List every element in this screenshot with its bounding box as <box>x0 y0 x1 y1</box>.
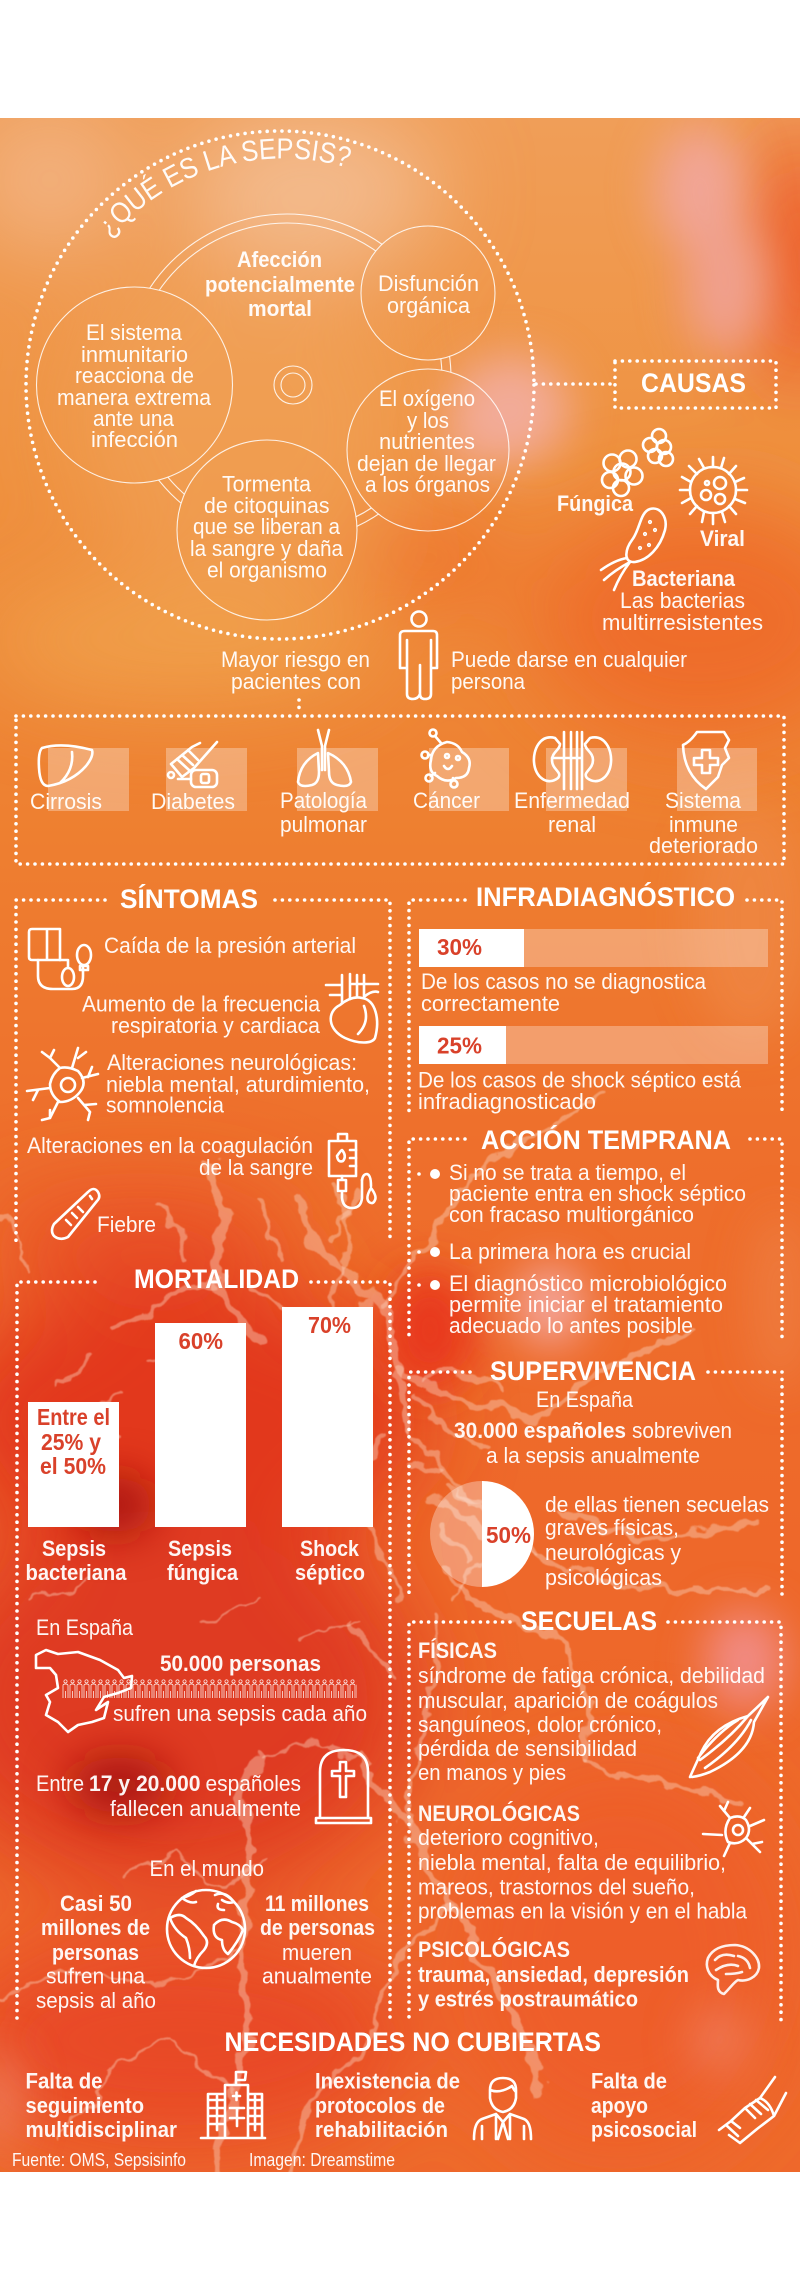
text: cualquier persona <box>451 647 687 694</box>
text: secuelas graves: de ellas tienen secuelas <box>545 1492 769 1517</box>
bar chart <box>26 1307 373 1585</box>
text: 11 millones: de personas <box>260 1915 375 1940</box>
text: sufren una sepsis: sufren una sepsis cada año <box>113 1701 367 1726</box>
text: fallecen: Entre <box>36 1771 84 1796</box>
text: enfermedad renal: renal <box>548 812 596 837</box>
text: 30.000 españoles <box>454 1418 732 1468</box>
text: neurológicas: deterioro cognitivo, <box>418 1825 599 1850</box>
icon: thermometer <box>52 1189 99 1239</box>
text: bacteriana: Bacteriana <box>632 566 736 591</box>
icon: map of Spain <box>36 1650 132 1732</box>
text: fallecen <box>36 1771 301 1821</box>
heading: supervivencia: SUPERVIVENCIA <box>490 1356 696 1386</box>
text: 30% caption: correctamente <box>421 991 560 1016</box>
icon: hospital <box>201 2072 265 2138</box>
text: neurológicas: problemas en la visión y en el habla <box>418 1898 748 1924</box>
bubble: sistema inmunitario: infección <box>91 427 178 452</box>
bar chart: séptico <box>295 1560 365 1585</box>
bubble: tormenta de citoquinas: el organismo <box>207 558 327 582</box>
text: sistema inmune deteriorado <box>649 788 758 858</box>
heading: infradiagnóstico: INFRADIAGNÓSTICO <box>476 881 735 912</box>
text: 11 millones <box>260 1891 375 1988</box>
pie chart: 50%: 50% <box>486 1522 531 1548</box>
text: falta de apoyo: apoyo <box>591 2093 648 2118</box>
bar chart: el 50% <box>40 1453 106 1479</box>
text: secuelas graves: psicológicas <box>545 1565 662 1590</box>
text: aumento frecuencia <box>82 992 321 1038</box>
panel: necesidades no cubiertas <box>26 2027 786 2143</box>
text: coagulación: Alteraciones en la coagulación <box>27 1133 313 1158</box>
bullet: si no se trata: con fracaso multiorgánico <box>449 1202 694 1227</box>
text: psicológicas <box>418 1937 689 2012</box>
text: patología pulmonar <box>280 788 368 837</box>
bar chart: 25% y <box>41 1429 101 1455</box>
bar chart: 70% <box>308 1312 351 1338</box>
text: enfermedad renal: Enfermedad <box>514 788 630 813</box>
bullet: diagnóstico microbiológico: permite iniciar el tratamiento <box>449 1292 723 1317</box>
heading: acción temprana: ACCIÓN TEMPRANA <box>481 1124 731 1155</box>
text: 11 millones: anualmente <box>262 1964 372 1988</box>
label: cáncer: Cáncer <box>413 788 480 813</box>
bubble: tormenta de citoquinas: que se liberan a <box>193 514 341 539</box>
text: bacteriana: Las bacterias <box>620 588 745 613</box>
pale squares <box>48 748 757 811</box>
text: en España: En España <box>36 1615 134 1640</box>
bar chart: fúngica <box>167 1560 239 1585</box>
text: en el mundo: En el mundo <box>150 1856 264 1881</box>
text: caída de la presión: Caída de la presión arterial <box>104 933 356 958</box>
text: falta de seguimiento <box>26 2068 177 2142</box>
icon: helping hands <box>719 2077 786 2143</box>
pie chart: 50% <box>430 1481 534 1587</box>
text: 30% caption: De los casos no se diagnostica <box>421 969 707 994</box>
bullet: si no se trata <box>419 1160 746 1227</box>
text: fallecen: fallecen anualmente <box>110 1796 301 1821</box>
bar chart: Sepsis <box>168 1536 232 1561</box>
connecting ring <box>149 214 452 527</box>
text: aumento frecuencia: respiratoria y cardiaca <box>111 1013 321 1038</box>
text: afección potencialmente mortal: mortal <box>248 296 312 321</box>
bullet: si no se trata: paciente entra en shock séptico <box>449 1181 746 1206</box>
icon: cancer cell <box>422 730 470 788</box>
icon: brain <box>707 1945 759 1994</box>
text: fallecen: 17 y 20.000 <box>89 1771 200 1796</box>
text: enfermedad renal <box>514 788 630 837</box>
text: falta de seguimiento: Falta de <box>26 2068 102 2094</box>
text: falta de apoyo <box>591 2068 697 2142</box>
icon: row of people <box>62 1679 357 1698</box>
text: coagulación: de la sangre <box>199 1155 313 1180</box>
bubble: sistema inmunitario: inmunitario <box>81 342 188 367</box>
icon: shield <box>683 732 729 789</box>
panel: secuelas <box>409 1606 781 2022</box>
text: inexistencia de protocolos: Inexistencia de <box>315 2068 460 2094</box>
text: físicas: muscular, aparición de coágulos <box>418 1688 718 1713</box>
text: casi 50 millones: Casi 50 <box>60 1891 132 1916</box>
label: viral: Viral <box>700 526 745 551</box>
bar chart: Sepsis <box>42 1536 106 1561</box>
text: neurológicas <box>418 1801 748 1924</box>
icon: virus <box>680 457 747 524</box>
text: afección potencialmente mortal: Afección <box>237 247 322 272</box>
text: afección potencialmente mortal <box>205 247 355 321</box>
bubble: disfunción orgánica <box>361 226 495 360</box>
text: neurológicas: niebla mental, falta de equilibrio, <box>418 1850 726 1875</box>
bar chart: bacteriana <box>26 1560 127 1585</box>
text: 25% caption <box>418 1068 742 1114</box>
text: 30% caption <box>421 969 707 1016</box>
text: físicas: síndrome de fatiga crónica, debilidad <box>418 1663 765 1688</box>
text: físicas: FÍSICAS <box>418 1638 497 1663</box>
text: fiebre: Fiebre <box>97 1212 156 1237</box>
bubble: tormenta de citoquinas: la sangre y daña <box>190 536 344 561</box>
bar chart: 60% <box>178 1328 223 1354</box>
text: 30.000 españoles: 30.000 españoles <box>454 1418 626 1443</box>
icon: muscle <box>690 1697 768 1777</box>
text: inexistencia de protocolos: rehabilitación <box>315 2117 448 2142</box>
title: curved heading: ¿QUÉ ES LA SEPSIS? <box>103 138 351 238</box>
text: bacteriana <box>602 566 763 635</box>
text: psicológicas: trauma, ansiedad, depresión <box>418 1962 689 1987</box>
text: sistema inmune deteriorado: deteriorado <box>649 833 758 858</box>
bubble: tormenta de citoquinas <box>177 440 357 620</box>
source credit: Imagen: Dreamstime <box>249 2150 395 2170</box>
text: falta de apoyo: psicosocial <box>591 2117 697 2142</box>
icon: blood pressure cuff <box>29 929 91 989</box>
bubble: oxígeno y nutrientes <box>347 369 509 531</box>
heading: secuelas: SECUELAS <box>521 1606 657 1636</box>
text: patología pulmonar: Patología <box>280 788 368 813</box>
panel: infradiagnóstico <box>409 881 782 1116</box>
text: fallecen: españoles <box>206 1771 301 1796</box>
bullet: primera hora: La primera hora es crucial <box>449 1239 691 1264</box>
icon: lungs <box>298 730 351 786</box>
text: 50.000 personas: 50.000 personas <box>160 1651 321 1676</box>
bubble: oxígeno y nutrientes: a los órganos <box>365 472 490 497</box>
bubble: oxígeno y nutrientes: dejan de llegar <box>357 451 496 476</box>
text: casi 50 millones: sepsis al año <box>36 1988 156 2013</box>
text: 11 millones: 11 millones <box>265 1891 369 1916</box>
text: alteraciones neurológicas: Alteraciones neurológicas: <box>107 1050 357 1075</box>
heading: mortalidad: MORTALIDAD <box>134 1264 299 1294</box>
text: alteraciones neurológicas: niebla mental, aturdimiento, <box>106 1072 370 1097</box>
bar: 30%: 30% <box>437 934 482 960</box>
text: 30.000 españoles: a la sepsis anualmente <box>486 1443 700 1468</box>
text: alteraciones neurológicas: somnolencia <box>106 1092 225 1118</box>
bubble: oxígeno y nutrientes: nutrientes <box>379 429 475 454</box>
text: inexistencia de protocolos <box>315 2068 460 2142</box>
icon: person <box>400 612 437 699</box>
text: cualquier persona: Puede darse en cualquier <box>451 647 687 672</box>
icon: heart <box>326 974 378 1042</box>
icon: bacteria <box>601 509 666 590</box>
icon: neuron small <box>703 1802 764 1856</box>
text: mayor riesgo <box>221 647 370 694</box>
text: neurológicas: mareos, trastornos del sueño, <box>418 1874 695 1900</box>
bubble: disfunción orgánica: orgánica <box>387 293 471 318</box>
text: 11 millones: mueren <box>282 1940 352 1965</box>
bubble: sistema inmunitario: ante una <box>93 406 175 431</box>
bubble: tormenta de citoquinas: Tormenta <box>222 472 312 496</box>
bubble: oxígeno y nutrientes: El oxígeno <box>379 386 475 411</box>
heading: causas: CAUSAS <box>641 368 746 398</box>
text: coagulación <box>27 1133 313 1180</box>
text: mayor riesgo: pacientes con <box>231 669 361 694</box>
icon: kidneys <box>534 732 611 789</box>
panel: síntomas <box>16 883 390 1242</box>
source credit <box>12 2150 395 2170</box>
text: físicas: en manos y pies <box>418 1760 566 1785</box>
text: cualquier persona: persona <box>451 669 526 694</box>
text: aumento frecuencia: Aumento de la frecuencia <box>82 992 321 1016</box>
text: casi 50 millones: millones de <box>41 1915 150 1940</box>
text: afección potencialmente mortal: potencialmente <box>205 272 355 297</box>
bullet: diagnóstico microbiológico <box>419 1271 727 1338</box>
icon: globe <box>167 1890 245 1968</box>
label: fúngica: Fúngica <box>557 491 634 516</box>
text: secuelas graves <box>545 1492 769 1590</box>
text: casi 50 millones: sufren una <box>46 1964 146 1988</box>
text: falta de seguimiento: multidisciplinar <box>26 2117 177 2142</box>
panel: causas <box>536 361 776 635</box>
bar chart: Entre el <box>37 1404 110 1430</box>
text: patología pulmonar: pulmonar <box>280 812 367 837</box>
heading: necesidades: NECESIDADES NO CUBIERTAS <box>224 2027 601 2057</box>
bubble: sistema inmunitario: El sistema <box>86 320 183 345</box>
text: 25% caption: infradiagnosticado <box>418 1089 596 1114</box>
panel: acción temprana <box>409 1124 782 1342</box>
text: neurológicas: NEUROLÓGICAS <box>418 1801 580 1826</box>
text: falta de apoyo: Falta de <box>591 2068 667 2094</box>
text: bacteriana: multirresistentes <box>602 610 763 635</box>
icon: doctor <box>474 2078 531 2139</box>
text: casi 50 millones <box>36 1891 156 2013</box>
text: físicas: sanguíneos, dolor crónico, <box>418 1712 662 1737</box>
bubble: disfunción orgánica: Disfunción <box>378 271 479 296</box>
bar: 30% <box>419 929 768 967</box>
bubble: sistema inmunitario: reacciona de <box>75 363 194 388</box>
icon: neuron <box>27 1048 98 1120</box>
panel: patologías de riesgo <box>16 716 784 864</box>
text: falta de seguimiento: seguimiento <box>26 2093 144 2118</box>
bullet: diagnóstico microbiológico: adecuado lo antes posible <box>449 1313 693 1338</box>
text: secuelas graves: graves físicas, <box>545 1515 679 1540</box>
text: alteraciones neurológicas <box>106 1050 370 1118</box>
text: sistema inmune deteriorado: inmune <box>669 812 738 837</box>
icon: tombstone <box>316 1750 371 1823</box>
text: en España: En España <box>536 1387 634 1412</box>
text: psicológicas: PSICOLÓGICAS <box>418 1937 570 1962</box>
bubble: sistema inmunitario: manera extrema <box>57 385 212 410</box>
bubble: sistema inmunitario <box>36 287 232 483</box>
bubble: tormenta de citoquinas: de citoquinas <box>204 493 330 518</box>
icon: IV drip <box>329 1134 376 1208</box>
text: psicológicas: y estrés postraumático <box>418 1986 638 2012</box>
heading: síntomas: SÍNTOMAS <box>120 883 258 914</box>
center ring icon <box>274 366 312 404</box>
text: físicas: pérdida de sensibilidad <box>418 1736 637 1761</box>
label: diabetes: Diabetes <box>151 789 235 814</box>
panel: mortalidad <box>17 1264 390 2024</box>
label: cirrosis: Cirrosis <box>30 789 102 814</box>
icon: fungi <box>602 429 673 496</box>
icon: liver <box>39 745 92 786</box>
bar: 25%: 25% <box>437 1032 482 1058</box>
text: casi 50 millones: personas <box>52 1940 139 1965</box>
text: secuelas graves: neurológicas y <box>545 1540 681 1565</box>
bullet: si no se trata: Si no se trata a tiempo, el <box>449 1160 686 1185</box>
source credit: Fuente: OMS, Sepsisinfo <box>12 2150 186 2170</box>
icon: glucometer and hand <box>168 742 217 787</box>
bar chart: Shock <box>300 1536 360 1561</box>
text: inexistencia de protocolos: protocolos de <box>315 2093 445 2118</box>
panel: supervivencia <box>409 1356 782 1595</box>
bar: 25% <box>419 1026 768 1064</box>
panel: ¿Qué es la sepsis? <box>24 129 536 641</box>
bullet: diagnóstico microbiológico: El diagnóstico microbiológico <box>449 1271 727 1296</box>
text: sistema inmune deteriorado: Sistema <box>665 788 742 813</box>
bubble: oxígeno y nutrientes: y los <box>407 408 449 433</box>
text: 25% caption: De los casos de shock séptico está <box>418 1068 742 1092</box>
text: físicas <box>418 1638 765 1785</box>
text: mayor riesgo: Mayor riesgo en <box>221 647 370 672</box>
text: 30.000 españoles: sobreviven <box>632 1418 732 1443</box>
